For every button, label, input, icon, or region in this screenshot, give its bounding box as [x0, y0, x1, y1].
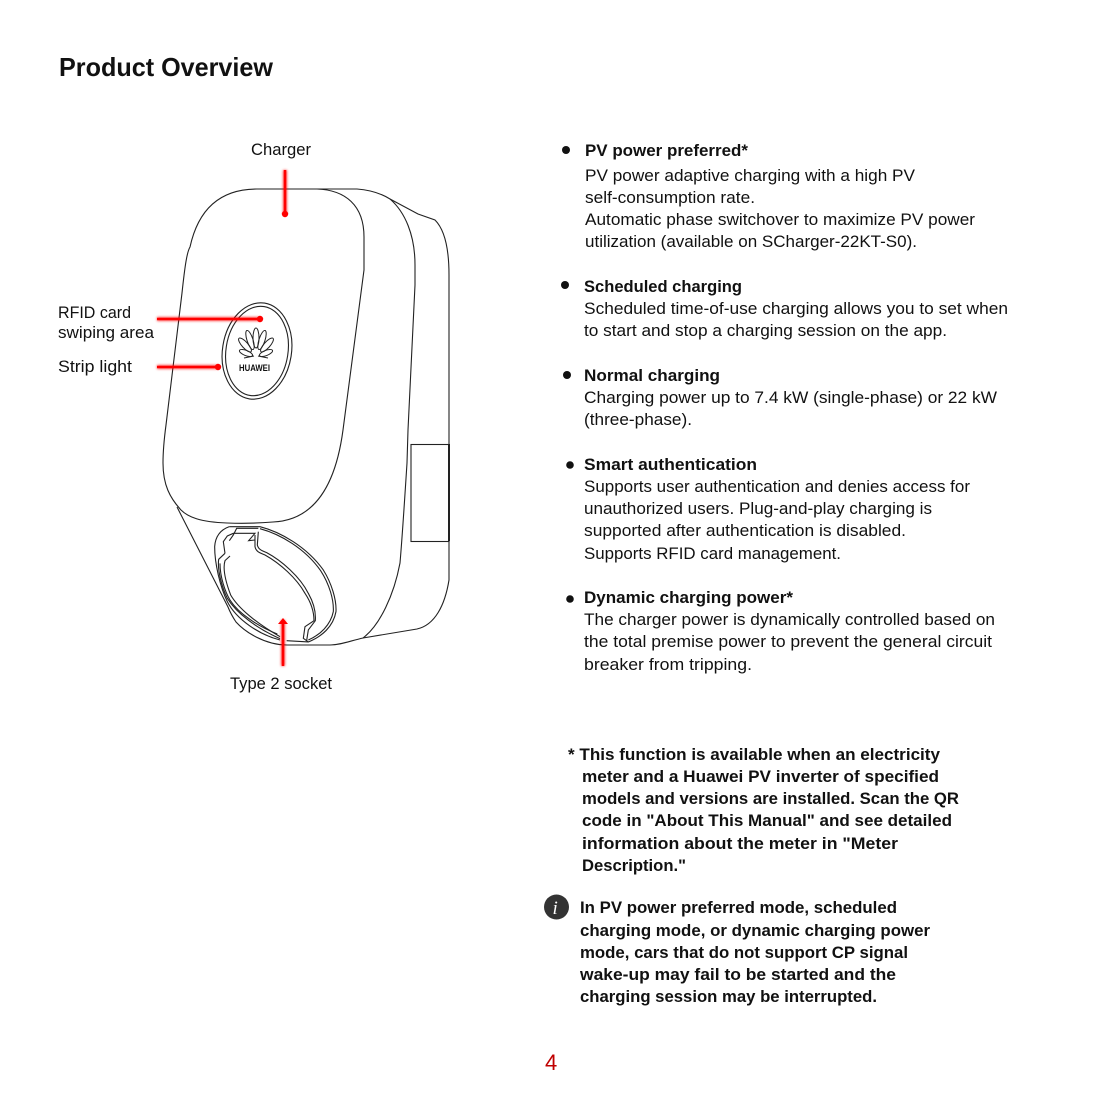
feature: Smart authentication — [566, 455, 970, 563]
charging indicator ring and Huawei logo: HUAWEI — [239, 363, 270, 373]
feature: PV power preferred: utilization (available on SCharger-22KT-S0). — [585, 232, 917, 251]
feature: Dynamic charging power — [566, 588, 995, 674]
information note — [579, 898, 930, 1006]
bullet — [562, 146, 570, 154]
footnote: Description." — [582, 856, 686, 875]
charger body line drawing — [163, 189, 449, 645]
title: Product Overview — [59, 52, 274, 82]
feature: Smart authentication: supported after authentication is disabled. — [584, 521, 906, 540]
feature: Normal charging: Charging power up to 7.4 kW (single-phase) or 22 kW — [584, 388, 997, 407]
feature: Scheduled charging: to start and stop a charging session on the app. — [584, 321, 947, 340]
feature: Dynamic charging power: Dynamic charging power* — [584, 588, 793, 607]
feature: Smart authentication: Supports user authentication and denies access for — [584, 477, 970, 496]
charging indicator ring and Huawei logo — [215, 298, 299, 404]
information note: In PV power preferred mode, scheduled — [580, 898, 897, 917]
footnote — [568, 745, 959, 875]
information note: charging session may be interrupted. — [580, 987, 877, 1006]
feature: PV power preferred: Automatic phase switchover to maximize PV power — [585, 210, 975, 229]
information note: mode, cars that do not support CP signal — [580, 943, 908, 962]
label: RFID card swiping area: RFID card — [58, 303, 131, 322]
information note: wake-up may fail to be started and the — [579, 965, 896, 984]
feature: Dynamic charging power: breaker from tripping. — [584, 655, 752, 674]
footnote: models and versions are installed. Scan the QR — [582, 789, 959, 808]
feature: Normal charging: Normal charging — [584, 366, 720, 385]
illustration: charger with callouts — [58, 140, 449, 693]
footnote: * This function is available when an electricity — [568, 745, 941, 764]
footnote: meter and a Huawei PV inverter of specified — [582, 767, 939, 786]
feature: PV power preferred: PV power adaptive charging with a high PV — [585, 166, 916, 185]
feature: PV power preferred: self-consumption rate. — [585, 188, 755, 207]
label: RFID card swiping area — [58, 303, 155, 342]
page number: 4 — [545, 1050, 557, 1075]
feature: Scheduled charging — [561, 277, 1008, 340]
label: Charger: Charger — [251, 140, 311, 159]
label: RFID card swiping area: swiping area — [58, 323, 155, 342]
footnote: code in "About This Manual" and see detailed — [582, 811, 952, 830]
feature: Scheduled charging: Scheduled charging — [584, 277, 742, 296]
feature: Normal charging: (three-phase). — [584, 410, 692, 429]
bullet — [566, 461, 574, 469]
icon: info: i — [552, 898, 558, 919]
feature: PV power preferred — [562, 141, 975, 251]
feature: Normal charging — [563, 366, 997, 429]
label: Type 2 socket: Type 2 socket — [230, 674, 332, 693]
feature: Scheduled charging: Scheduled time-of-use charging allows you to set when — [584, 299, 1008, 318]
bullet — [563, 371, 571, 379]
bullet — [561, 281, 569, 289]
Type 2 socket — [215, 527, 336, 642]
footnote: information about the meter in "Meter — [582, 834, 898, 853]
feature: Smart authentication: unauthorized users. Plug-and-play charging is — [584, 499, 932, 518]
feature: PV power preferred: PV power preferred* — [585, 141, 748, 160]
feature: Smart authentication: Supports RFID card management. — [584, 544, 841, 563]
feature: Smart authentication: Smart authentication — [584, 455, 757, 474]
label: Strip light: Strip light — [58, 357, 132, 376]
feature: Dynamic charging power: the total premise power to prevent the general circuit — [584, 632, 992, 651]
information note: charging mode, or dynamic charging power — [580, 921, 930, 940]
icon: info — [544, 894, 569, 920]
bullet — [566, 595, 574, 603]
red callout pointers — [157, 170, 288, 666]
feature: Dynamic charging power: The charger power is dynamically controlled based on — [584, 610, 995, 629]
